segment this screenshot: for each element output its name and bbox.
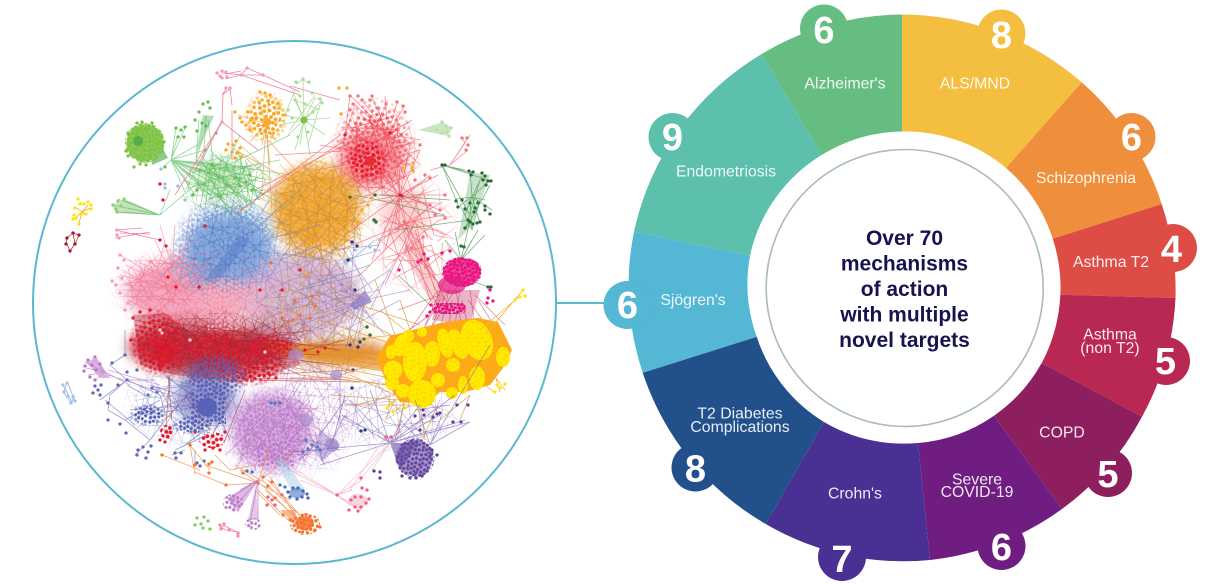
cluster: purple-blue blob bbox=[280, 345, 490, 495]
segment: Severe COVID-19 bbox=[918, 416, 1062, 570]
connector line bbox=[556, 302, 606, 304]
segment: Severe COVID-19: Severe bbox=[952, 472, 1002, 488]
centre text: of action bbox=[861, 278, 948, 301]
soft colour masses bbox=[126, 128, 428, 468]
cluster: pink lower bbox=[290, 470, 369, 511]
segment: ALS/MND: ALS/MND bbox=[940, 76, 1010, 92]
segment: Sjögren's: Sjögren's bbox=[660, 292, 726, 309]
cluster: light green top bbox=[280, 79, 347, 155]
segment: Alzheimer's bbox=[762, 4, 902, 155]
cluster: small dark red bbox=[66, 233, 79, 251]
segment: T2 Diabetes Complications: T2 Diabetes bbox=[697, 406, 783, 422]
segment: Endometriosis: Endometriosis bbox=[676, 164, 776, 180]
web textures bbox=[105, 100, 465, 485]
segment: ALS/MND bbox=[902, 10, 1082, 168]
segment: Asthma T2: 4 bbox=[1161, 229, 1182, 271]
segment: T2 Diabetes Complications: 8 bbox=[685, 448, 706, 490]
cluster: dark red and red bbox=[128, 305, 350, 450]
segment: Endometriosis: 9 bbox=[662, 117, 683, 159]
segment: COPD: 5 bbox=[1097, 454, 1119, 496]
segment: T2 Diabetes Complications bbox=[643, 337, 824, 524]
cluster: light blue tiny bbox=[63, 383, 75, 404]
segment: Asthma T2 bbox=[1053, 204, 1197, 298]
cluster: pink left bbox=[110, 184, 300, 350]
cluster: mauve lower fans bbox=[223, 478, 261, 530]
centre text bbox=[839, 227, 970, 352]
segment: Sjögren's bbox=[604, 232, 757, 373]
inner ring bbox=[766, 150, 1043, 426]
centre text: Over 70 bbox=[866, 227, 943, 250]
segment: ALS/MND: 8 bbox=[991, 15, 1012, 57]
panel: network diagram bbox=[33, 41, 606, 564]
segment: Crohn's: Crohn's bbox=[828, 486, 882, 502]
segment: Asthma (non T2) bbox=[1042, 295, 1190, 417]
segment: Crohn's bbox=[766, 422, 930, 581]
segment: Asthma (non T2): Asthma bbox=[1083, 326, 1137, 344]
cluster: light green fan bbox=[125, 122, 168, 167]
segment: Severe COVID-19: 6 bbox=[991, 527, 1012, 569]
segment: Asthma (non T2): (non T2) bbox=[1080, 340, 1140, 357]
segment: Alzheimer's: Alzheimer's bbox=[804, 76, 886, 92]
cluster: central mixed web bbox=[240, 225, 410, 431]
cluster: small green lower bbox=[195, 517, 210, 529]
cluster: red main bbox=[235, 95, 470, 310]
segment: Crohn's: 7 bbox=[831, 539, 853, 581]
segment: COPD bbox=[994, 363, 1142, 509]
segment: Asthma T2: Asthma T2 bbox=[1073, 254, 1149, 271]
cluster: green hub and spread bbox=[163, 102, 300, 235]
cluster: magenta bbox=[395, 251, 505, 340]
segment: Schizophrenia: Schizophrenia bbox=[1036, 170, 1136, 187]
cluster: orange central bbox=[262, 155, 372, 275]
segment: T2 Diabetes Complications: Complications bbox=[690, 419, 790, 436]
cluster: blue lower bbox=[267, 460, 308, 505]
centre text: mechanisms bbox=[841, 252, 968, 276]
centre text: with multiple bbox=[839, 304, 969, 326]
segment: Schizophrenia: 6 bbox=[1121, 117, 1142, 159]
inner hole bbox=[750, 132, 1060, 443]
cluster: light green left fan bbox=[112, 185, 195, 215]
segment: Endometriosis bbox=[634, 54, 822, 256]
cluster: mauve fan left bbox=[84, 357, 170, 395]
cluster: pink top branches bbox=[115, 68, 340, 240]
cluster: light blue bbox=[155, 169, 380, 297]
segment: Schizophrenia bbox=[1006, 82, 1162, 239]
cluster: light green right fan bbox=[418, 122, 452, 136]
cluster: mauve central bbox=[225, 307, 350, 480]
centre text: novel targets bbox=[839, 329, 970, 352]
cluster: small pink lower bbox=[220, 524, 238, 536]
segment: Sjögren's: 6 bbox=[617, 285, 638, 327]
cluster: small yellow bbox=[73, 199, 91, 224]
segment: Alzheimer's: 6 bbox=[813, 10, 835, 52]
segment: Severe COVID-19: COVID-19 bbox=[941, 484, 1014, 501]
panel: disease wheel bbox=[604, 4, 1197, 581]
outer circle bbox=[33, 41, 556, 564]
cluster: orange streams to yellow bbox=[240, 280, 470, 445]
cluster: orange top bbox=[226, 90, 300, 210]
segment: Asthma (non T2): 5 bbox=[1155, 341, 1176, 383]
cluster: orange lower web bbox=[162, 445, 320, 535]
cluster: dark green bbox=[350, 165, 492, 305]
segment: COPD: COPD bbox=[1039, 424, 1085, 442]
cluster: indigo bbox=[93, 330, 250, 466]
cluster: yellow blob bbox=[376, 290, 525, 412]
